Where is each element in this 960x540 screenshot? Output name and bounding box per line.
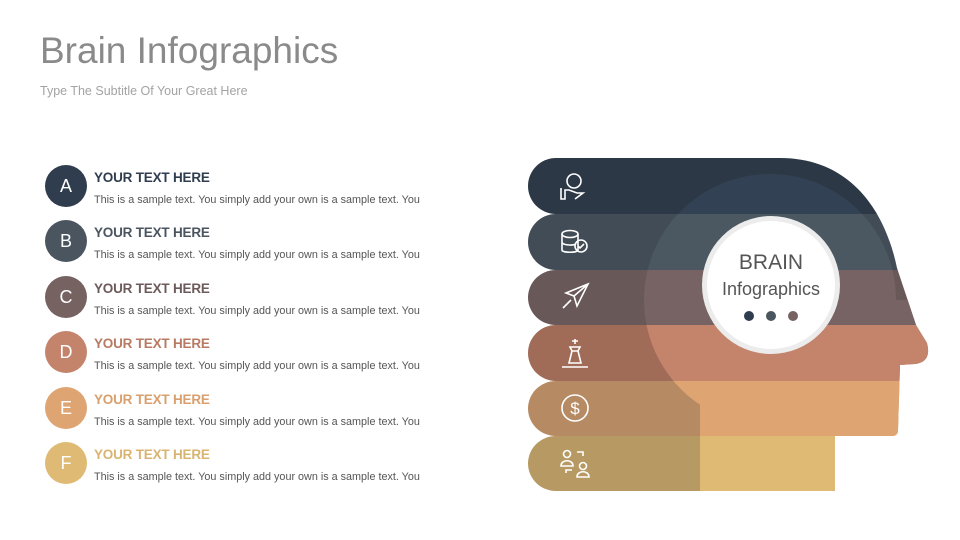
item A: YOUR TEXT HERE (94, 170, 210, 185)
item D (45, 331, 420, 373)
center badge: BRAIN (739, 251, 803, 274)
center badge: Infographics (722, 279, 820, 299)
item B: YOUR TEXT HERE (94, 225, 210, 240)
item D: D (60, 342, 72, 362)
item D: YOUR TEXT HERE (94, 336, 210, 351)
item A: This is a sample text. You simply add your own is a sample text. You (94, 194, 420, 206)
icon: dollar: $ (570, 399, 580, 418)
item A (45, 165, 420, 207)
item E (45, 387, 420, 429)
center badge (702, 216, 840, 354)
item C (45, 276, 420, 318)
item E: YOUR TEXT HERE (94, 392, 210, 407)
item F (45, 442, 420, 484)
icon: hand coin (561, 174, 583, 199)
icon: people swap (561, 450, 589, 477)
item B (45, 220, 420, 262)
item D: This is a sample text. You simply add your own is a sample text. You (94, 360, 420, 372)
item A: A (60, 176, 72, 196)
item F: This is a sample text. You simply add your own is a sample text. You (94, 471, 420, 483)
item F: F (60, 453, 72, 473)
item B: B (60, 231, 72, 251)
icon: dollar (562, 395, 588, 421)
subtitle: Type The Subtitle Of Your Great Here (40, 84, 248, 98)
item C: This is a sample text. You simply add your own is a sample text. You (94, 305, 420, 317)
icon: database check (562, 230, 587, 252)
item E: E (60, 398, 72, 418)
item C: YOUR TEXT HERE (94, 281, 210, 296)
item E: This is a sample text. You simply add your own is a sample text. You (94, 416, 420, 428)
icon: paper plane (563, 284, 588, 308)
head diagram (528, 158, 928, 491)
item B: This is a sample text. You simply add your own is a sample text. You (94, 249, 420, 261)
item F: YOUR TEXT HERE (94, 447, 210, 462)
icon: chess (562, 339, 588, 367)
title: Brain Infographics (40, 30, 338, 71)
icons (561, 174, 589, 477)
item C: C (60, 287, 72, 307)
